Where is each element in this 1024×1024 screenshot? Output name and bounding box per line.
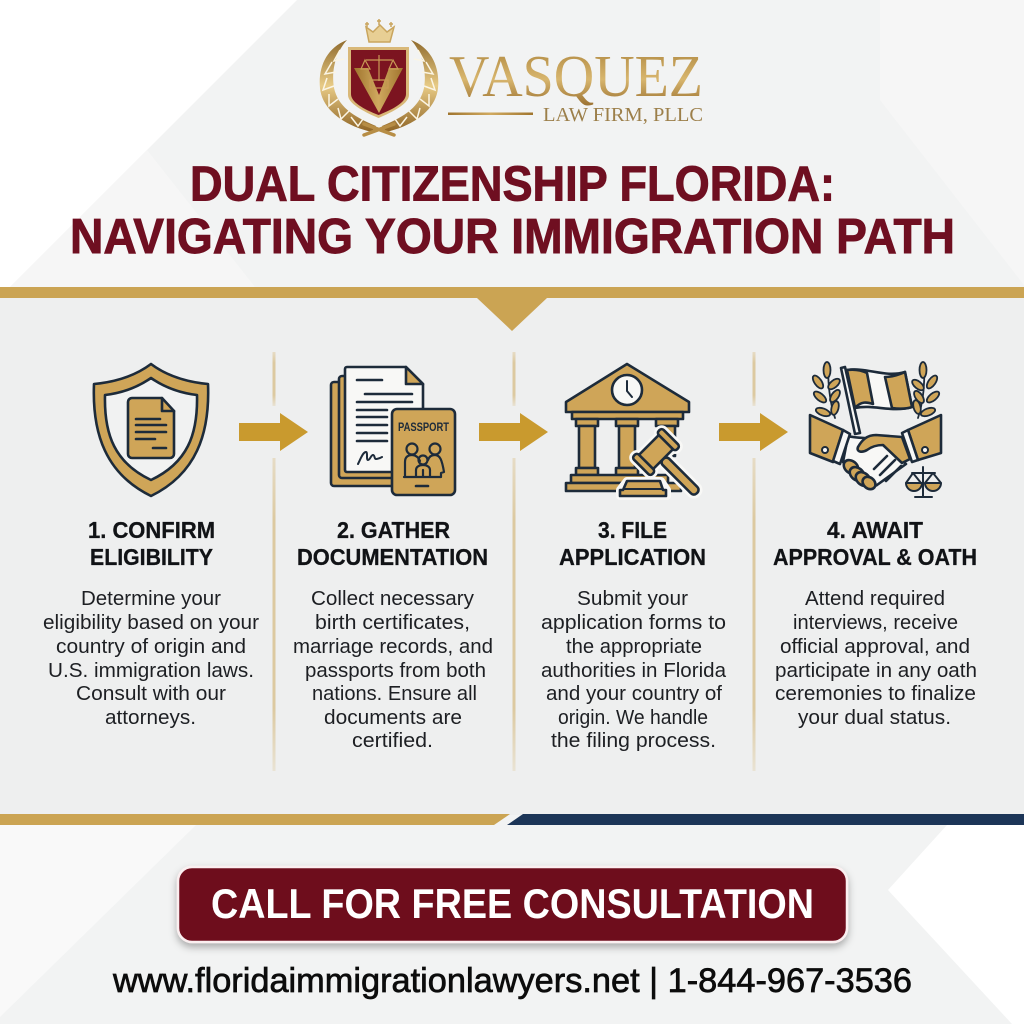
heading: step 1 [88, 517, 215, 570]
text: step 2 description: marriage records, and [293, 636, 493, 658]
text: step 4 description: interviews, receive [793, 612, 958, 634]
text: step 3 description: the appropriate [566, 636, 702, 658]
text: step 1 description: attorneys. [105, 707, 196, 729]
panel: step 3 file application [541, 364, 727, 752]
panel: step 4 await approval and oath [773, 362, 977, 729]
icon: courthouse and gavel [566, 364, 712, 508]
gold header rule with pointer [0, 287, 1024, 331]
text: step 3 description: origin. We handle [558, 707, 708, 729]
text: step 2 description: nations. Ensure all [312, 683, 477, 705]
text: step 2 description: passports from both [305, 660, 486, 682]
panel: step 2 gather documentation [293, 367, 493, 752]
text: step 3 description: and your country of [546, 683, 722, 705]
text: step 1 description: Consult with our [76, 683, 226, 705]
contact line: www.floridaimmigrationlawyers.net | 1-844-967-3536 [112, 962, 912, 1000]
logo wordmark: VASQUEZ [449, 43, 703, 109]
text: step 1 description: Determine your [81, 588, 221, 610]
text: step 4 description: participate in any oath [775, 660, 977, 682]
icon: crown [365, 19, 394, 42]
column dividers [272, 352, 756, 771]
text: step 4 description: your dual status. [798, 707, 951, 729]
heading: step 1: ELIGIBILITY [90, 544, 213, 570]
heading: step 3: APPLICATION [559, 544, 706, 570]
title: NAVIGATING YOUR IMMIGRATION PATH [70, 209, 955, 264]
title: DUAL CITIZENSHIP FLORIDA: [190, 156, 835, 212]
panel: step 1 confirm eligibility [43, 364, 259, 729]
heading: step 2: DOCUMENTATION [297, 544, 488, 570]
arrow: step 3 to 4 [719, 413, 788, 451]
text: step 3 description: authorities in Florida [541, 660, 727, 682]
heading: step 4: APPROVAL & OATH [773, 544, 977, 570]
heading: step 4: 4. AWAIT [827, 517, 924, 543]
heading: step 3 [559, 517, 706, 570]
call to action button [178, 867, 847, 942]
text: step 1 description: country of origin and [56, 636, 246, 658]
icon: shield crest [348, 47, 409, 118]
text: step 2 description: documents are [324, 707, 462, 729]
text: step 3 description: the filing process. [551, 730, 716, 752]
logo: Vasquez Law Firm [320, 19, 703, 135]
text: step 3 description [541, 588, 727, 752]
text: step 1 description: eligibility based on your [43, 612, 259, 634]
text: step 1 description [43, 588, 259, 729]
passport label: PASSPORT [398, 422, 449, 434]
heading: step 3: 3. FILE [598, 517, 667, 543]
heading: step 4 [773, 517, 977, 570]
heading: step 1: 1. CONFIRM [88, 517, 215, 543]
icon: documents and passport [331, 367, 455, 495]
text: step 2 description [293, 588, 493, 752]
heading: step 2: 2. GATHER [337, 517, 450, 543]
text: step 2 description: Collect necessary [311, 588, 474, 610]
gavel [632, 428, 712, 508]
call to action button: CALL FOR FREE CONSULTATION [211, 880, 814, 927]
logo subtitle: LAW FIRM, PLLC [543, 104, 703, 126]
icon: handshake, flag, laurels and scales [810, 362, 941, 497]
footer rule gold and navy [0, 814, 1024, 825]
title [70, 156, 955, 264]
text: step 4 description: ceremonies to finalize [775, 683, 976, 705]
text: step 4 description: official approval, and [780, 636, 970, 658]
text: step 3 description: application forms to [541, 612, 726, 634]
text: step 1 description: U.S. immigration laws. [48, 660, 254, 682]
text: step 2 description: birth certificates, [315, 612, 470, 634]
arrow: step 1 to 2 [239, 413, 308, 451]
arrow: step 2 to 3 [479, 413, 548, 451]
icon: laurel wreath [320, 40, 438, 135]
text: step 2 description: certified. [352, 730, 433, 752]
icon: shield with document [94, 364, 208, 496]
text: step 4 description: Attend required [805, 588, 945, 610]
text: step 3 description: Submit your [577, 588, 688, 610]
text: step 4 description [775, 588, 977, 729]
heading: step 2 [297, 517, 488, 570]
